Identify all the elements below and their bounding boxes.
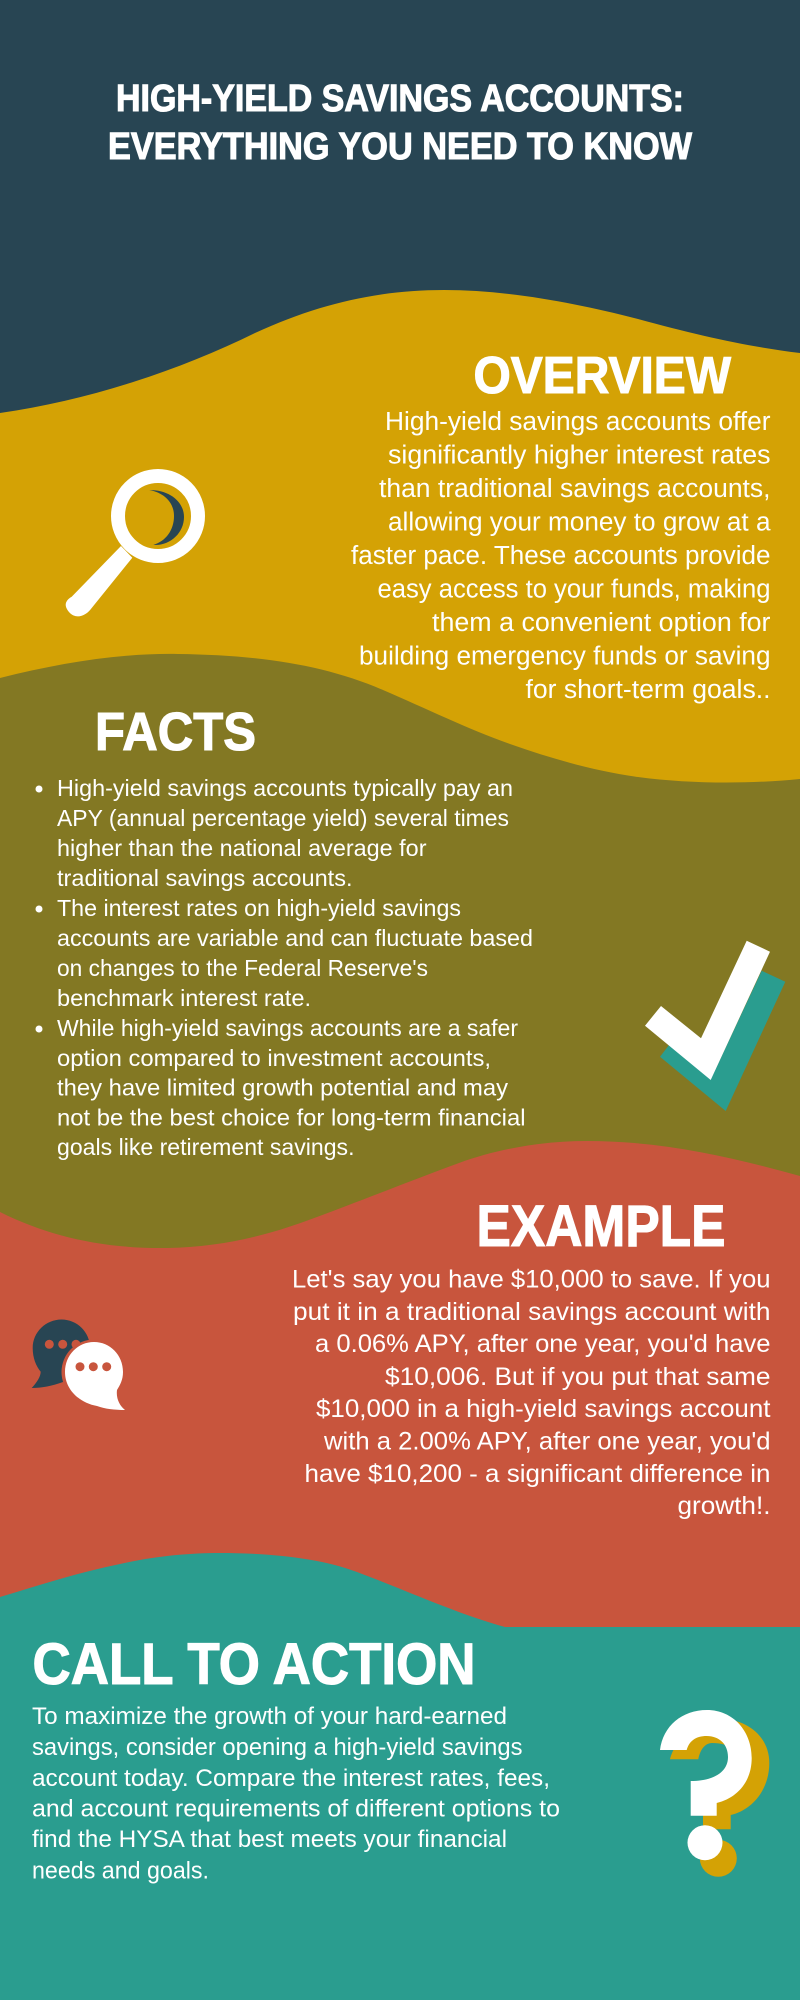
- text block: facts list: benchmark interest rate.: [57, 985, 311, 1011]
- heading: example: EXAMPLE: [476, 1194, 726, 1259]
- text block: example: growth!.: [678, 1492, 770, 1520]
- title: HIGH-YIELD SAVINGS ACCOUNTS:: [116, 78, 684, 120]
- text block: example: put it in a traditional savings account with: [293, 1298, 770, 1326]
- text block: facts list: traditional savings accounts.: [57, 865, 352, 891]
- text block: overview: High-yield savings accounts offer: [385, 408, 771, 436]
- text block: overview: significantly higher interest rates: [388, 442, 770, 470]
- text block: facts list: While high-yield savings accounts are a safer: [57, 1015, 518, 1041]
- text block: overview: [351, 408, 771, 704]
- heading: facts: FACTS: [95, 702, 256, 762]
- text block: facts list: on changes to the Federal Reserve's: [57, 955, 428, 981]
- title: [108, 78, 692, 168]
- text block: facts list: accounts are variable and can fluctuate based: [57, 925, 533, 951]
- panel: facts wave: [0, 654, 800, 2000]
- text block: overview: for short-term goals..: [526, 676, 770, 704]
- text block: facts list: High-yield savings accounts typically pay an: [57, 775, 513, 801]
- title: EVERYTHING YOU NEED TO KNOW: [108, 126, 692, 168]
- text block: facts list: they have limited growth potential and may: [57, 1074, 509, 1100]
- text block: call to action: find the HYSA that best meets your financial: [32, 1826, 507, 1853]
- text block: overview: easy access to your funds, making: [378, 576, 770, 604]
- icon: check mark: [645, 941, 785, 1111]
- panel: example wave: [0, 1141, 800, 2000]
- text block: call to action: [32, 1703, 560, 1884]
- text block: facts list: not be the best choice for long-term financial: [57, 1104, 526, 1130]
- icon: speech bubbles: [32, 1320, 127, 1410]
- text block: example: $10,006. But if you put that same: [385, 1363, 770, 1391]
- text block: facts list: higher than the national average for: [57, 835, 427, 861]
- icon: magnifying glass: [66, 476, 198, 616]
- text block: facts list: [36, 775, 533, 1160]
- text block: facts list: The interest rates on high-yield savings: [57, 895, 461, 921]
- text block: overview: allowing your money to grow at a: [388, 508, 771, 536]
- text block: facts list: APY (annual percentage yield) several times: [57, 805, 509, 831]
- text block: overview: than traditional savings accounts,: [379, 475, 770, 503]
- text block: call to action: To maximize the growth of your hard-earned: [32, 1703, 507, 1730]
- text block: facts list: goals like retirement savings.: [57, 1134, 354, 1160]
- text block: example: with a 2.00% APY, after one year, you'd: [323, 1428, 770, 1456]
- text block: example: [292, 1266, 771, 1520]
- text block: overview: them a convenient option for: [432, 609, 771, 637]
- text block: example: have $10,200 - a significant difference in: [304, 1460, 770, 1488]
- text block: call to action: savings, consider opening a high-yield savings: [32, 1734, 522, 1761]
- text block: overview: building emergency funds or saving: [359, 642, 770, 670]
- text block: overview: faster pace. These accounts provide: [351, 542, 770, 570]
- text block: example: Let's say you have $10,000 to save. If you: [292, 1266, 770, 1294]
- text block: call to action: needs and goals.: [32, 1858, 209, 1884]
- text block: example: $10,000 in a high-yield savings account: [316, 1395, 771, 1423]
- text block: call to action: account today. Compare the interest rates, fees,: [32, 1765, 550, 1792]
- icon: question mark: [660, 1710, 769, 1877]
- panel: call to action wave: [0, 1553, 800, 2000]
- text block: example: a 0.06% APY, after one year, you'd have: [315, 1330, 770, 1358]
- text block: facts list: option compared to investment accounts,: [57, 1045, 491, 1071]
- heading: call to action: CALL TO ACTION: [32, 1632, 476, 1697]
- heading: overview: OVERVIEW: [474, 347, 732, 405]
- text block: call to action: and account requirements of different options to: [32, 1796, 560, 1822]
